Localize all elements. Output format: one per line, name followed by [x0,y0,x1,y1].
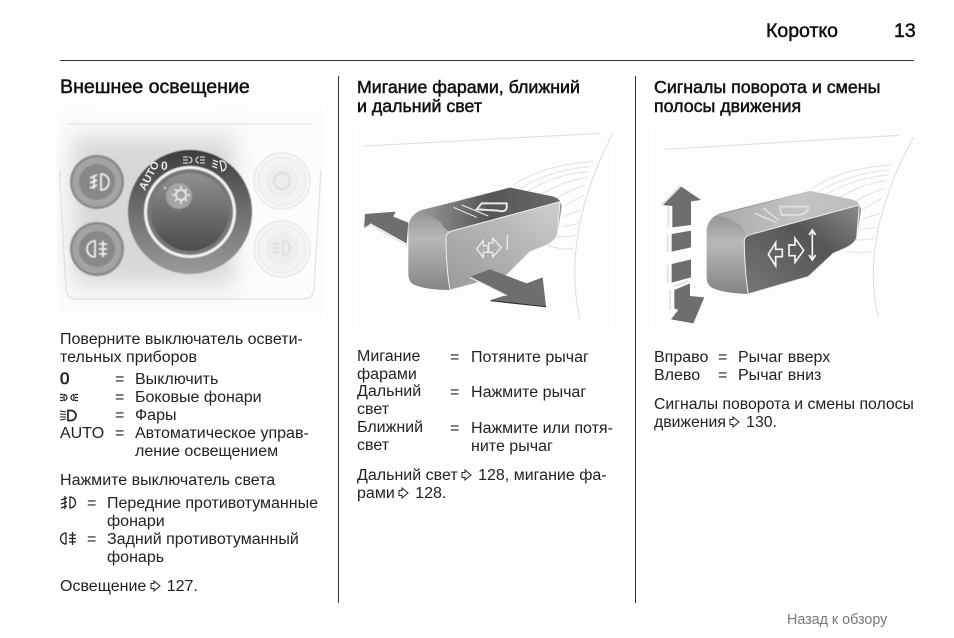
panel 1 intro text: Поверните выключатель освети- [60,330,303,348]
cross reference: lighting: Освещение 127. [60,577,198,595]
main light rotary switch: AUTO [137,159,162,192]
legend: fog lights: Передние противотуманные [107,494,318,512]
cross reference: turn signals: движения 130. [654,414,777,431]
ghosted right buttons [254,153,310,277]
cross reference: turn signals [654,396,914,431]
lever stalk ribs [812,165,892,252]
legend: switch positions: Боковые фонари [135,388,262,406]
panel 1 intro text: тельных приборов [60,348,197,366]
illustration: light switch panel [58,106,322,318]
legend: switch positions: = [115,388,124,406]
legend: switch positions: ление освещением [135,442,278,460]
lever body [707,191,861,294]
panel 1 heading: Внешнее освещение [60,76,250,98]
page header title: Коротко [766,20,838,42]
panel 3 action table: Рычаг вниз [738,366,821,384]
panel 2 action table: = [450,419,459,437]
panel 2 action table [357,347,613,455]
icon: headlights [60,410,77,422]
rear fog lamp button [70,222,124,276]
lever stalk ribs [513,162,593,249]
panel 3 heading: полосы движения [654,96,801,116]
panel 2 action table: ните рычаг [471,437,553,455]
cross reference: high beam and flash: рами 128. [357,484,446,502]
legend: fog lights: = [87,530,96,548]
legend: switch positions: AUTO [60,424,104,442]
panel 2 action table: Потяните рычаг [471,348,589,366]
illustration: turn signal lever [653,127,913,333]
legend: switch positions: = [115,370,124,388]
arrow: up and down [662,186,704,323]
panel 3 heading: Сигналы поворота и смены [654,77,880,97]
panel 2 action table: Ближний [357,418,423,436]
icon: side lights [60,394,78,402]
main light rotary switch [128,150,252,274]
panel 2 action table: Мигание [357,347,420,365]
legend: fog lights: фонари [107,512,165,530]
panel 3 heading [654,77,880,116]
panel 3 action table: Рычаг вверх [738,348,830,366]
icon: off: 0 [60,369,69,388]
cross reference: turn signals: Сигналы поворота и смены полосы [654,396,914,413]
panel 2 action table: Нажмите или потя- [471,419,613,437]
text: press switch: Нажмите выключатель света [60,471,275,489]
panel 2 action table: = [450,348,459,366]
back to overview link: Назад к обзору [787,612,887,628]
cross reference: high beam and flash [357,466,607,502]
panel 3 action table: Влево [654,366,700,384]
legend: fog lights [60,494,318,566]
legend: switch positions: Фары [135,406,177,424]
panel 2 action table: = [450,383,459,401]
panel 2 heading: и дальний свет [357,96,482,116]
legend: switch positions: = [115,406,124,424]
panel 2 action table: свет [357,400,389,418]
legend: switch positions [60,369,309,460]
front fog lamp button [70,155,124,209]
arrow: pull left [364,212,408,245]
panel 2 action table: фарами [357,365,417,383]
panel 3 action table [654,348,830,384]
panel 3 action table: = [718,348,727,366]
illustration: headlight flash lever [357,127,613,333]
cross reference: high beam and flash: Дальний свет 128, мигание фа- [357,466,607,484]
legend: fog lights: = [87,494,96,512]
panel 3 action table: Вправо [654,348,708,366]
page number: 13 [894,20,916,42]
lever body [408,188,562,290]
panel 2 action table: Нажмите рычаг [471,383,586,401]
main light rotary switch: 0 [161,159,168,173]
panel 2 heading: Мигание фарами, ближний [357,77,580,97]
legend: switch positions: = [115,424,124,442]
arrow: push right [470,269,546,307]
panel 1 intro text [60,330,303,366]
legend: fog lights: фонарь [107,548,164,566]
panel 3 action table: = [718,366,727,384]
icon: rear fog [60,532,76,545]
legend: switch positions: Выключить [135,370,218,388]
panel 2 action table: Дальний [357,382,421,400]
legend: fog lights: Задний противотуманный [107,530,299,548]
panel 2 heading [357,77,580,116]
panel 2 action table: свет [357,436,389,454]
icon: front fog [60,496,76,509]
legend: switch positions: Автоматическое управ- [135,424,309,442]
